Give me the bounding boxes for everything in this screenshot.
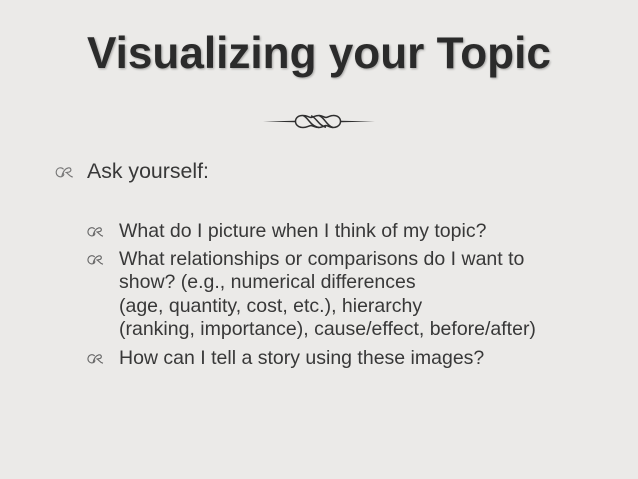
bullet: question 1 — [87, 227, 104, 237]
bullet: question 3 — [87, 354, 104, 364]
text: question 2: (ranking, importance), cause/effect, before/after) — [119, 318, 536, 340]
title: Visualizing your Topic — [87, 29, 551, 78]
text: question 3: How can I tell a story using these images? — [119, 347, 484, 369]
text: question 1: What do I picture when I think of my topic? — [119, 220, 486, 242]
text: question 2: show? (e.g., numerical differences — [119, 271, 416, 293]
bullet: Ask yourself — [56, 167, 73, 178]
text: question 2 — [119, 248, 536, 340]
bullet: question 2 — [87, 255, 104, 265]
text: question 2: (age, quantity, cost, etc.), hierarchy — [119, 295, 422, 317]
text: Ask yourself: Ask yourself: — [87, 159, 209, 183]
ornament divider — [264, 114, 374, 128]
text: question 2: What relationships or comparisons do I want to — [119, 248, 524, 270]
